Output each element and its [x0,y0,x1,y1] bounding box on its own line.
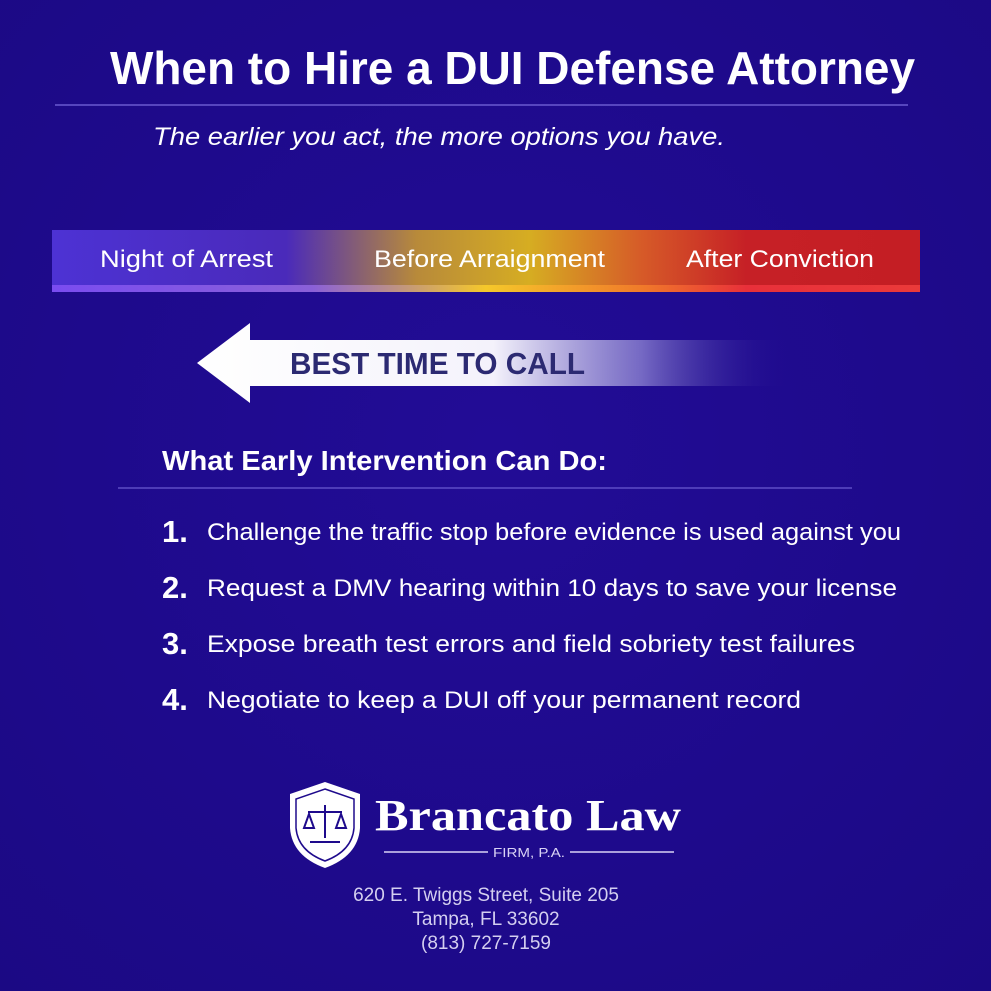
icon: shield with scales [290,782,360,868]
title: When to Hire a DUI Defense Attorney [110,42,915,94]
list of benefits: Challenge the traffic stop before evidence is used against you [207,519,901,546]
list of benefits [162,514,901,717]
address block [353,885,619,954]
list of benefits: 1. [162,514,188,549]
label: before arraignment: Before Arraignment [374,246,605,273]
list of benefits: 4. [162,682,188,717]
subtitle: The earlier you act, the more options you have. [153,123,725,151]
arrow: best time to call [197,323,790,403]
timeline bar [52,230,920,292]
address block: (813) 727-7159 [421,933,551,954]
address block: 620 E. Twiggs Street, Suite 205 [353,885,619,906]
logo [290,782,681,868]
list of benefits: Negotiate to keep a DUI off your permanent record [207,687,801,714]
list of benefits: Expose breath test errors and field sobriety test failures [207,631,855,658]
firm name: Brancato Law [375,791,681,840]
address block: Tampa, FL 33602 [412,909,560,930]
list of benefits: 3. [162,626,188,661]
heading: early intervention: What Early Intervention Can Do: [162,445,607,476]
logo: FIRM, P.A. [493,845,565,860]
label: night of arrest: Night of Arrest [100,246,273,273]
list of benefits: 2. [162,570,188,605]
label: after conviction: After Conviction [686,246,874,273]
list of benefits: Request a DMV hearing within 10 days to save your license [207,575,897,602]
arrow: best time to call: BEST TIME TO CALL [290,346,585,381]
